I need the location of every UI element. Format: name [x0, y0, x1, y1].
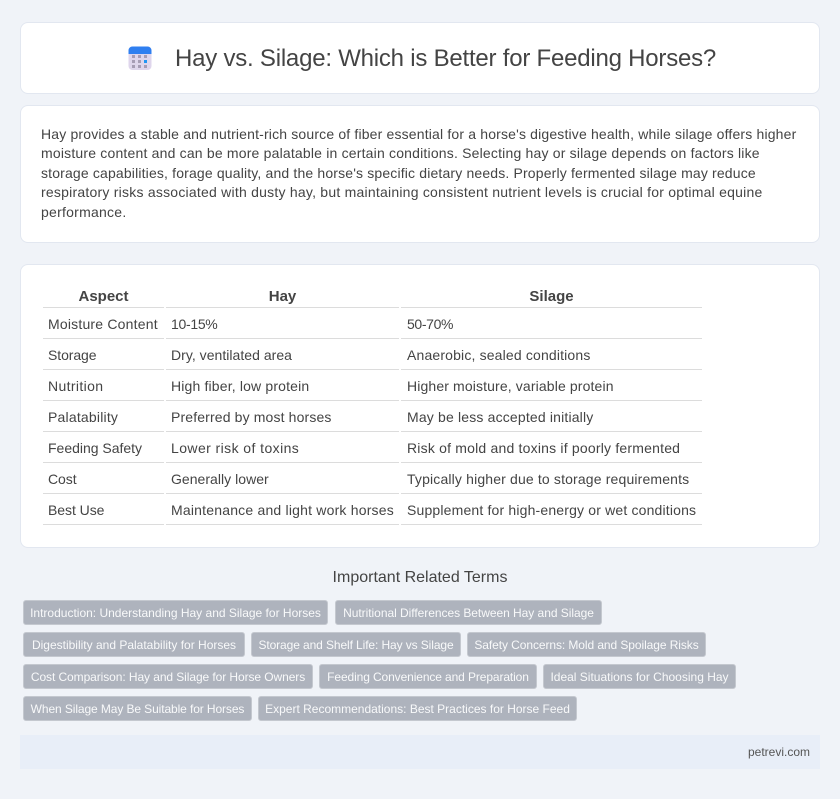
tag list: related terms — [23, 600, 736, 721]
tag list: related terms: Nutritional Differences Between Hay and Silage — [343, 606, 594, 620]
tag list: related terms: Digestibility and Palatability for Horses — [32, 638, 236, 652]
comparison table: Typically higher due to storage requirements — [407, 471, 689, 487]
text block: intro: Hay provides a stable and nutrient-rich source of fiber essential for a horse's digestive health, while silage offers higher — [41, 126, 796, 142]
comparison table: Maintenance and light work horses — [171, 502, 394, 518]
panel: header — [20, 22, 820, 94]
comparison table — [43, 288, 702, 525]
comparison table: Nutrition — [48, 378, 103, 394]
comparison table: Aspect — [78, 288, 129, 305]
comparison table: Lower risk of toxins — [171, 440, 299, 456]
comparison table: May be less accepted initially — [407, 409, 593, 425]
comparison table: Generally lower — [171, 471, 269, 487]
text block: intro: respiratory risks associated with dusty hay, but maintaining consistent nutrient levels is crucial for optimal equine — [41, 184, 763, 200]
comparison table: High fiber, low protein — [171, 378, 309, 394]
tag list: related terms: Storage and Shelf Life: Hay vs Silage — [258, 638, 454, 652]
comparison table: 50-70% — [407, 316, 453, 332]
panel: intro — [20, 105, 820, 243]
comparison table: Storage — [48, 347, 96, 363]
comparison table: Hay — [269, 288, 296, 305]
tag list: related terms: Ideal Situations for Choosing Hay — [550, 670, 729, 684]
comparison table: Preferred by most horses — [171, 409, 332, 425]
comparison table: Moisture Content — [48, 316, 158, 332]
text block: intro: moisture content and can be more palatable in certain conditions. Selecting hay or silage depends on factors like — [41, 145, 760, 161]
comparison table: Higher moisture, variable protein — [407, 378, 614, 394]
text block: intro: storage capabilities, forage quality, and the horse's specific dietary needs. Properly fermented silage may reduce — [41, 165, 756, 181]
heading: related terms: Important Related Terms — [333, 569, 507, 586]
comparison table: Palatability — [48, 409, 118, 425]
comparison table: Feeding Safety — [48, 440, 142, 456]
comparison table: Cost — [48, 471, 77, 487]
text block: intro — [41, 126, 796, 220]
footer bar — [20, 735, 820, 769]
comparison table: Silage — [529, 288, 574, 305]
tag list: related terms: Feeding Convenience and Preparation — [327, 670, 529, 684]
tag list: related terms: Safety Concerns: Mold and Spoilage Risks — [474, 638, 699, 652]
comparison table: 10-15% — [171, 316, 217, 332]
comparison table: Dry, ventilated area — [171, 347, 292, 363]
text block: intro: performance. — [41, 204, 126, 220]
comparison table: Anaerobic, sealed conditions — [407, 347, 590, 363]
tag list: related terms: Cost Comparison: Hay and Silage for Horse Owners — [31, 670, 305, 684]
footer: source: petrevi.com — [748, 745, 810, 759]
comparison table: Best Use — [48, 502, 104, 518]
icon: calendar — [128, 46, 152, 70]
panel: comparison table — [20, 264, 820, 548]
title: Hay vs. Silage: Which is Better for Feeding Horses? — [175, 45, 716, 72]
tag list: related terms: Expert Recommendations: Best Practices for Horse Feed — [265, 702, 570, 716]
tag list: related terms: When Silage May Be Suitable for Horses — [31, 702, 244, 716]
tag list: related terms: Introduction: Understanding Hay and Silage for Horses — [30, 606, 321, 620]
comparison table: Supplement for high-energy or wet conditions — [407, 502, 696, 518]
comparison table: Risk of mold and toxins if poorly fermented — [407, 440, 680, 456]
